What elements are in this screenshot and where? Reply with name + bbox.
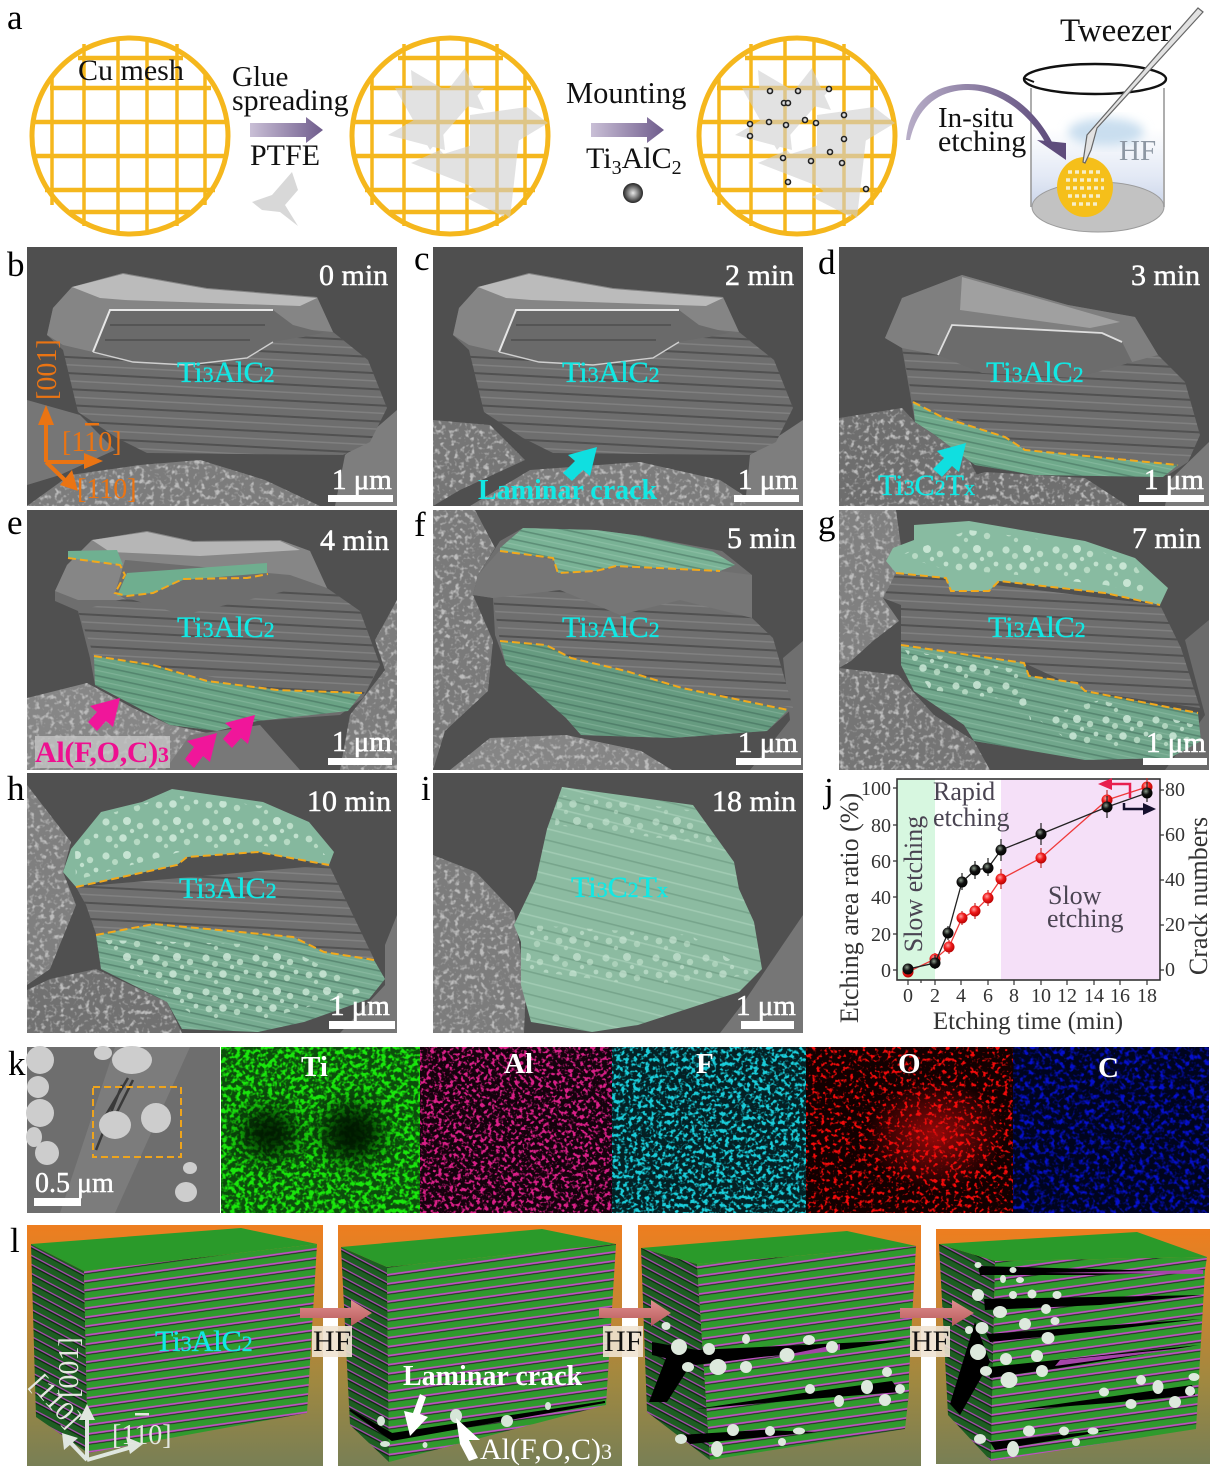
- panel label k: k: [8, 1044, 26, 1083]
- SEM image with selection box: [26, 1046, 220, 1213]
- arrow: mounting: AlC: [622, 142, 672, 175]
- panel k: EDS maps: [8, 1044, 1209, 1213]
- left axis numbers: 20: [871, 924, 891, 946]
- black series: crack numbers: [902, 782, 1152, 974]
- panel label j: j: [822, 771, 834, 810]
- right axis numbers: 60: [1165, 824, 1185, 846]
- panel e: SEM 4 min: Ti3AlC2: [177, 611, 275, 644]
- arrow: mounting: [566, 76, 686, 203]
- left axis numbers: 60: [871, 851, 891, 873]
- panel c: SEM 2 min: Laminar crack: [478, 475, 658, 506]
- stage 1: pristine block: Ti3AlC2: [155, 1325, 253, 1358]
- panel label i: i: [421, 769, 431, 808]
- stage 2: laminar crack: Al(F,O,C)3: [480, 1433, 612, 1466]
- map: Al: Al: [504, 1048, 533, 1080]
- stage 2: laminar crack: [338, 1225, 622, 1466]
- left axis numbers: 100: [861, 778, 891, 800]
- panel b: SEM 0 min: 1 μm: [332, 464, 392, 496]
- panel b: SEM 0 min: [27, 247, 397, 506]
- stage labels: etching: [933, 803, 1010, 832]
- x axis numbers: [903, 985, 1157, 1007]
- panel d: SEM 3 min: 1 μm: [1144, 464, 1204, 496]
- panel c: SEM 2 min: [433, 247, 803, 506]
- map: O: [806, 1047, 1013, 1213]
- panel i: SEM 18 min: 18 min: [712, 785, 796, 818]
- arrow: glue spreading: spreading: [232, 84, 349, 117]
- axis titles: Etching area ratio (%): [835, 793, 864, 1023]
- arrow: mounting: Ti: [586, 142, 612, 175]
- panel d: SEM 3 min: Ti3AlC2: [986, 356, 1084, 389]
- panel label e: e: [7, 503, 23, 542]
- x axis numbers: 6: [983, 985, 993, 1007]
- panel g: SEM 7 min: 1 μm: [1146, 727, 1206, 759]
- stage labels: Rapid: [933, 777, 995, 806]
- mesh with glue and Ti3AlC2 particles: [699, 38, 895, 234]
- panel b: SEM 0 min: [110]: [77, 474, 137, 505]
- panel label f: f: [414, 505, 426, 544]
- map: Ti: Ti: [301, 1051, 328, 1083]
- map: C: C: [1098, 1052, 1119, 1084]
- x axis numbers: 8: [1009, 985, 1019, 1007]
- mesh with PTFE glue: [352, 38, 548, 234]
- curved arrow: in-situ etching: [906, 84, 1066, 160]
- arrow: glue spreading: [232, 61, 349, 226]
- panel label h: h: [7, 769, 25, 808]
- axis ticks: [893, 788, 1164, 985]
- axis titles: [835, 793, 1213, 1035]
- stage labels: etching: [1047, 904, 1124, 933]
- HF arrow 1: HF: [313, 1325, 351, 1358]
- map: O: O: [898, 1048, 921, 1080]
- panel i: SEM 18 min: Ti3C2Tx: [571, 871, 668, 904]
- arrow: mounting: Mounting: [566, 76, 686, 110]
- HF arrow 2: HF: [604, 1325, 642, 1358]
- right axis numbers: 20: [1165, 914, 1185, 936]
- curved arrow: in-situ etching: etching: [938, 125, 1026, 158]
- stage labels: Slow etching: [899, 816, 928, 952]
- panel b: SEM 0 min: 0 min: [319, 259, 388, 292]
- panel e: SEM 4 min: Al(F,O,C)3: [35, 736, 169, 769]
- panel label c: c: [414, 239, 430, 278]
- x axis numbers: 4: [956, 985, 966, 1007]
- axis titles: Etching time (min): [933, 1008, 1123, 1035]
- panel c: SEM 2 min: Ti3AlC2: [562, 356, 660, 389]
- x axis numbers: 12: [1057, 985, 1077, 1007]
- panel f: SEM 5 min: 1 μm: [738, 727, 798, 759]
- panel g: SEM 7 min: 7 min: [1132, 522, 1201, 555]
- panel e: SEM 4 min: [27, 510, 397, 770]
- Cu mesh grid: [32, 38, 228, 234]
- map: F: F: [696, 1048, 714, 1080]
- panel b: SEM 0 min: [001]: [32, 339, 63, 400]
- panel a: preparation schematic: [7, 0, 1203, 234]
- x axis numbers: 10: [1031, 985, 1051, 1007]
- panel d: SEM 3 min: Ti3C2Tx: [878, 469, 975, 502]
- panel label l: l: [10, 1221, 20, 1260]
- map: F: [612, 1047, 806, 1213]
- panel label d: d: [818, 243, 836, 282]
- stage labels: [899, 777, 1124, 952]
- HF arrow 3: [900, 1300, 974, 1358]
- HF arrow 2: [599, 1300, 671, 1358]
- map: Ti: [221, 1047, 420, 1213]
- panel c: SEM 2 min: 1 μm: [738, 464, 798, 496]
- beaker with HF and tweezer: Tweezer: [1060, 13, 1171, 49]
- stage 1: pristine block: [24, 1225, 323, 1466]
- beaker with HF and tweezer: HF: [1119, 135, 1156, 167]
- left axis numbers: 80: [871, 815, 891, 837]
- panel h: SEM 10 min: Ti3AlC2: [179, 872, 277, 905]
- panel d: SEM 3 min: 3 min: [1131, 259, 1200, 292]
- right axis numbers: 40: [1165, 869, 1185, 891]
- beaker with HF and tweezer: [1024, 8, 1203, 232]
- map: Al: [420, 1047, 612, 1213]
- stage 1: pristine block: [001]: [54, 1337, 85, 1398]
- arrow: glue spreading: Glue: [232, 61, 288, 93]
- panel i: SEM 18 min: [433, 773, 803, 1033]
- axis direction arrows: [1098, 778, 1156, 815]
- panel h: SEM 10 min: 1 μm: [330, 990, 390, 1022]
- stage 4: many cracks: [936, 1229, 1210, 1464]
- panel b: SEM 0 min: Ti3AlC2: [177, 356, 275, 389]
- x axis numbers: 14: [1084, 985, 1104, 1007]
- right axis numbers: 0: [1165, 959, 1175, 981]
- stage 2: laminar crack: Laminar crack: [403, 1361, 583, 1392]
- right axis numbers: 80: [1165, 779, 1185, 801]
- map: C: [1013, 1047, 1209, 1213]
- panel b: SEM 0 min: [110]: [62, 427, 122, 458]
- etching stage bands: [897, 779, 1160, 980]
- panel g: SEM 7 min: Ti3AlC2: [988, 611, 1086, 644]
- panel e: SEM 4 min: 1 μm: [332, 726, 392, 758]
- panel d: SEM 3 min: [839, 247, 1209, 506]
- red series: etching area ratio: [902, 778, 1152, 978]
- stage 1: pristine block: [110]: [24, 1369, 87, 1434]
- x axis numbers: 2: [930, 985, 940, 1007]
- panel l: etching mechanism schematic: [10, 1221, 1210, 1466]
- stage 1: pristine block: [110]: [112, 1420, 172, 1451]
- Cu mesh grid: Cu mesh: [78, 54, 184, 87]
- x axis numbers: 0: [903, 985, 913, 1007]
- stage labels: Slow: [1048, 881, 1102, 910]
- panel h: SEM 10 min: [27, 773, 397, 1033]
- right axis numbers: [1165, 779, 1185, 981]
- HF arrow 1: [300, 1300, 372, 1358]
- panel h: SEM 10 min: 10 min: [307, 785, 391, 818]
- left axis numbers: 40: [871, 887, 891, 909]
- arrow: mounting: 3: [612, 157, 622, 179]
- panel f: SEM 5 min: [433, 510, 803, 770]
- x axis numbers: 16: [1110, 985, 1130, 1007]
- SEM image with selection box: 0.5 μm: [35, 1168, 114, 1199]
- x axis numbers: 18: [1137, 985, 1157, 1007]
- curved arrow: in-situ etching: In-situ: [938, 102, 1014, 134]
- left axis numbers: [861, 778, 891, 982]
- panel f: SEM 5 min: 5 min: [727, 522, 796, 555]
- HF arrow 3: HF: [911, 1325, 949, 1358]
- panel j: etching chart: [822, 771, 1213, 1035]
- axis titles: Crack numbers: [1184, 817, 1213, 975]
- panel i: SEM 18 min: 1 μm: [736, 990, 796, 1022]
- arrow: glue spreading: PTFE: [250, 139, 320, 172]
- stage 3: several cracks: [638, 1225, 921, 1466]
- arrow: mounting: 2: [672, 157, 682, 179]
- panel f: SEM 5 min: Ti3AlC2: [562, 611, 660, 644]
- panel label g: g: [818, 503, 836, 542]
- panel c: SEM 2 min: 2 min: [725, 259, 794, 292]
- panel e: SEM 4 min: 4 min: [320, 524, 389, 557]
- panel label b: b: [7, 245, 24, 284]
- panel g: SEM 7 min: [839, 510, 1209, 770]
- left axis numbers: 0: [881, 960, 891, 982]
